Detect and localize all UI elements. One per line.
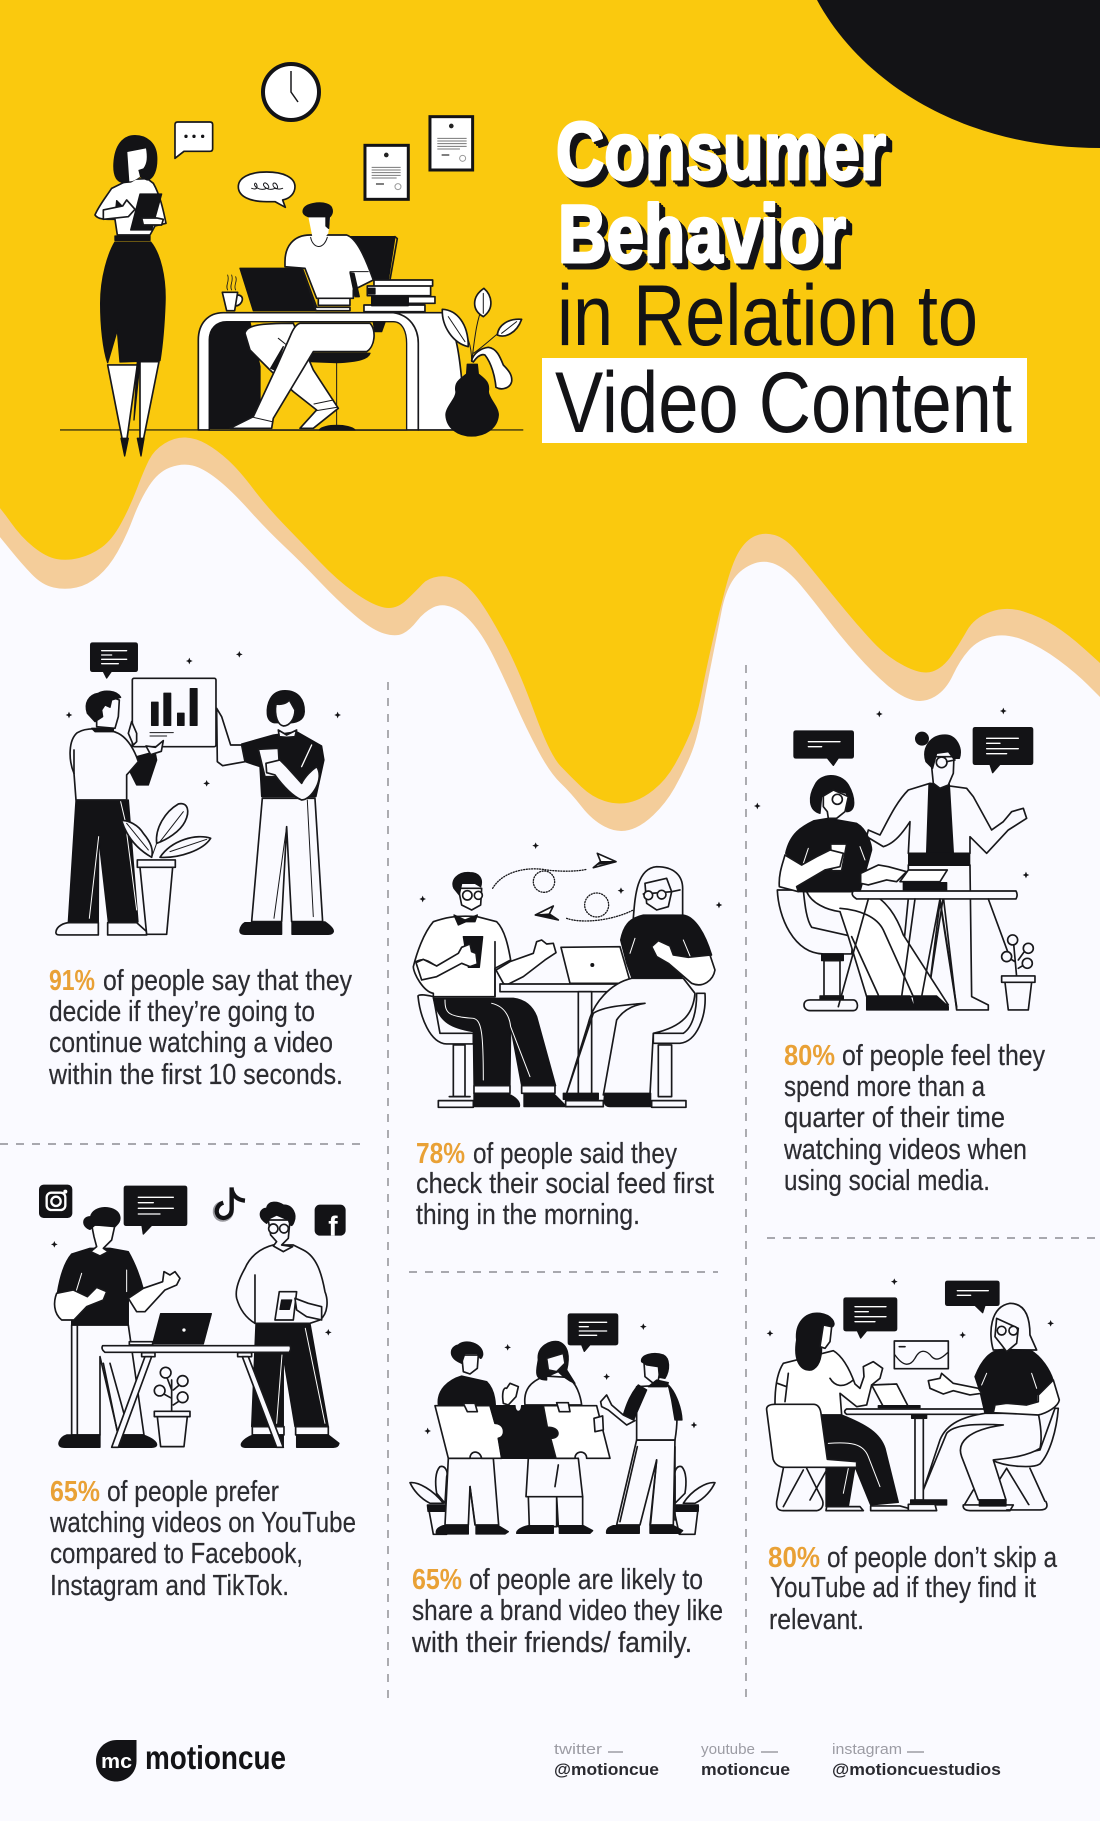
torso <box>285 235 373 298</box>
figure: man in black shirt <box>55 1208 180 1447</box>
stat text: 80%: 80% <box>784 1040 835 1072</box>
stat text: 65% share: with their friends/ family. <box>411 1627 692 1659</box>
stat text: 65% YouTube: compared to Facebook, <box>50 1538 303 1570</box>
icon: speech bubble left <box>844 1298 897 1338</box>
icon: Instagram <box>40 1185 72 1217</box>
stat text: 80% <box>783 1040 1045 1197</box>
stat text: 65% YouTube: of people prefer <box>107 1476 279 1508</box>
desk <box>198 313 465 430</box>
icon: Facebook <box>315 1205 345 1241</box>
social: youtube <box>701 1741 790 1779</box>
stat text: 80%: spend more than a <box>784 1071 986 1103</box>
dashed dividers <box>0 665 1100 1702</box>
stat text: 78%: of people said they <box>473 1138 677 1170</box>
dotted flight paths <box>493 869 633 921</box>
social: youtube: motioncue <box>701 1760 790 1779</box>
stat text: 65% share <box>411 1564 723 1659</box>
stat text: 78%: thing in the morning. <box>416 1199 640 1231</box>
figure: man with clipboard <box>236 1202 339 1447</box>
illustration: two people at table with paper planes <box>413 842 722 1107</box>
illustration: three people with puzzle <box>410 1314 715 1534</box>
social: twitter: twitter <box>554 1741 602 1758</box>
icon: speech bubble <box>568 1314 618 1351</box>
social: twitter <box>554 1741 659 1779</box>
panel: 80% don't skip YouTube ad <box>767 1278 1059 1636</box>
white title box <box>542 358 1027 443</box>
stat text: 91%: decide if they’re going to <box>49 996 315 1028</box>
figure: man with phone <box>413 873 565 1107</box>
figure: woman right <box>923 1303 1059 1511</box>
stat text: 80% skip: relevant. <box>769 1604 864 1636</box>
table <box>845 1409 993 1511</box>
title line: Video Content: Video Content <box>555 355 1012 451</box>
figure: woman left <box>775 1313 883 1415</box>
icon: speech bubble <box>124 1186 187 1234</box>
stat text: 80% skip: of people don’t skip a <box>827 1542 1058 1574</box>
chair seat and base <box>335 363 338 425</box>
panel: 80% time watching videos <box>754 708 1045 1197</box>
icon: speech bubble right <box>973 728 1033 773</box>
stat text: 91%: 91% <box>49 965 95 997</box>
stat text: 91%: of people say that they <box>103 965 352 997</box>
stat text: 65% YouTube <box>49 1476 356 1602</box>
stat text: 65% share: of people are likely to <box>469 1564 703 1596</box>
icon: Facebook: f <box>328 1210 338 1241</box>
potted plant <box>122 804 211 934</box>
chart screen <box>894 1341 948 1369</box>
icon: speech bubble <box>91 643 137 678</box>
title <box>542 106 1027 451</box>
stack of books <box>364 280 435 312</box>
puzzle <box>435 1403 610 1458</box>
stat text: 78%: 78% <box>416 1138 465 1170</box>
social: instagram <box>832 1741 1001 1779</box>
panel: 78% check social feed <box>413 842 722 1231</box>
icon: speech bubble with dots <box>175 122 213 158</box>
figure: person with dark shirt <box>436 1342 518 1534</box>
figure: woman <box>217 691 333 934</box>
stat text: 65% YouTube: watching videos on YouTube <box>49 1507 356 1539</box>
figure: woman with puzzle <box>517 1341 593 1533</box>
social: instagram: @motioncuestudios <box>832 1760 1001 1779</box>
logo: motioncue: motioncue <box>145 1739 286 1776</box>
paper planes <box>535 853 616 920</box>
footer <box>96 1739 1001 1782</box>
stat text: 80%: using social media. <box>784 1165 990 1197</box>
illustration: two people with chart board <box>56 643 341 935</box>
social: instagram: instagram <box>832 1741 902 1758</box>
stat text: 80% skip <box>768 1542 1058 1636</box>
icon: speech bubble right <box>946 1281 999 1313</box>
logo: motioncue <box>96 1739 286 1782</box>
stat text: 65% share: 65% <box>412 1564 462 1596</box>
black corner shape <box>817 0 1100 148</box>
chair <box>777 890 857 1011</box>
stat text: 65% share: share a brand video they like <box>412 1595 723 1627</box>
chart board <box>132 678 216 747</box>
hero illustration: office scene <box>60 64 523 456</box>
ground line <box>60 428 523 432</box>
peach wave edge <box>0 0 1100 831</box>
laptop <box>240 268 316 311</box>
icon: wall clock <box>263 64 319 120</box>
illustration: two women at a round table <box>767 1278 1059 1511</box>
yellow header wave <box>0 0 1100 803</box>
figure: woman with laptop <box>567 867 715 1107</box>
stat text: 80%: of people feel they <box>842 1040 1045 1072</box>
front leg <box>230 323 374 428</box>
figure: man in raglan shirt <box>601 1354 683 1533</box>
illustration: two men at table with social icons <box>40 1185 345 1447</box>
table with laptop and plant <box>102 1314 291 1447</box>
panel: 65% prefer YouTube <box>40 1185 356 1602</box>
title line: Behavior: Behavior <box>558 189 846 280</box>
title line: Consumer: Consumer <box>556 106 886 197</box>
stat text: 65% YouTube: Instagram and TikTok. <box>50 1570 289 1602</box>
coffee cup <box>222 292 242 311</box>
laptop <box>872 1384 920 1408</box>
back leg <box>245 323 338 428</box>
logo: motioncue: mc <box>101 1751 132 1773</box>
icon: TikTok <box>215 1187 245 1220</box>
icon: speech bubble left <box>794 731 853 765</box>
icon: oval speech bubble <box>238 172 295 207</box>
figure: man <box>56 691 163 935</box>
stat text: 78% <box>416 1138 714 1231</box>
social: youtube: youtube <box>701 1741 755 1758</box>
potted plant <box>1002 935 1035 1010</box>
office scene drawing <box>60 117 523 456</box>
chair back <box>348 237 395 280</box>
stat text: 80% skip: YouTube ad if they find it <box>770 1572 1036 1604</box>
stat text: 91% <box>48 965 352 1091</box>
stat text: 80%: watching videos when <box>783 1134 1027 1166</box>
table with tablet <box>838 870 1017 1007</box>
panel: 65% share brand video <box>410 1314 723 1659</box>
stat text: 65% YouTube: 65% <box>50 1476 100 1508</box>
stat text: 80% skip: 80% <box>768 1542 820 1574</box>
desk and seated man <box>198 203 465 430</box>
figure: seated legs and chair left <box>767 1404 908 1511</box>
vase with plant <box>442 288 522 436</box>
table with laptop <box>500 947 667 1107</box>
right chair <box>652 993 705 1107</box>
left chair <box>418 995 473 1107</box>
figure: standing woman with tablet <box>95 136 166 456</box>
panel: 91% decide within 10 seconds <box>48 643 352 1091</box>
stat text: 91%: continue watching a video <box>49 1027 333 1059</box>
social: twitter: @motioncue <box>554 1760 659 1779</box>
figure: seated woman <box>779 776 948 1010</box>
title line: in Relation to: in Relation to <box>557 268 978 364</box>
stat text: 91%: within the first 10 seconds. <box>48 1059 343 1091</box>
plants <box>410 1466 715 1534</box>
stat text: 78%: check their social feed first <box>416 1168 714 1200</box>
framed certificate right <box>430 117 473 170</box>
figure: standing woman <box>867 732 1027 1010</box>
illustration: two women at table with plant <box>754 708 1035 1011</box>
stat text: 80%: quarter of their time <box>784 1102 1005 1134</box>
framed certificate left <box>365 145 408 199</box>
